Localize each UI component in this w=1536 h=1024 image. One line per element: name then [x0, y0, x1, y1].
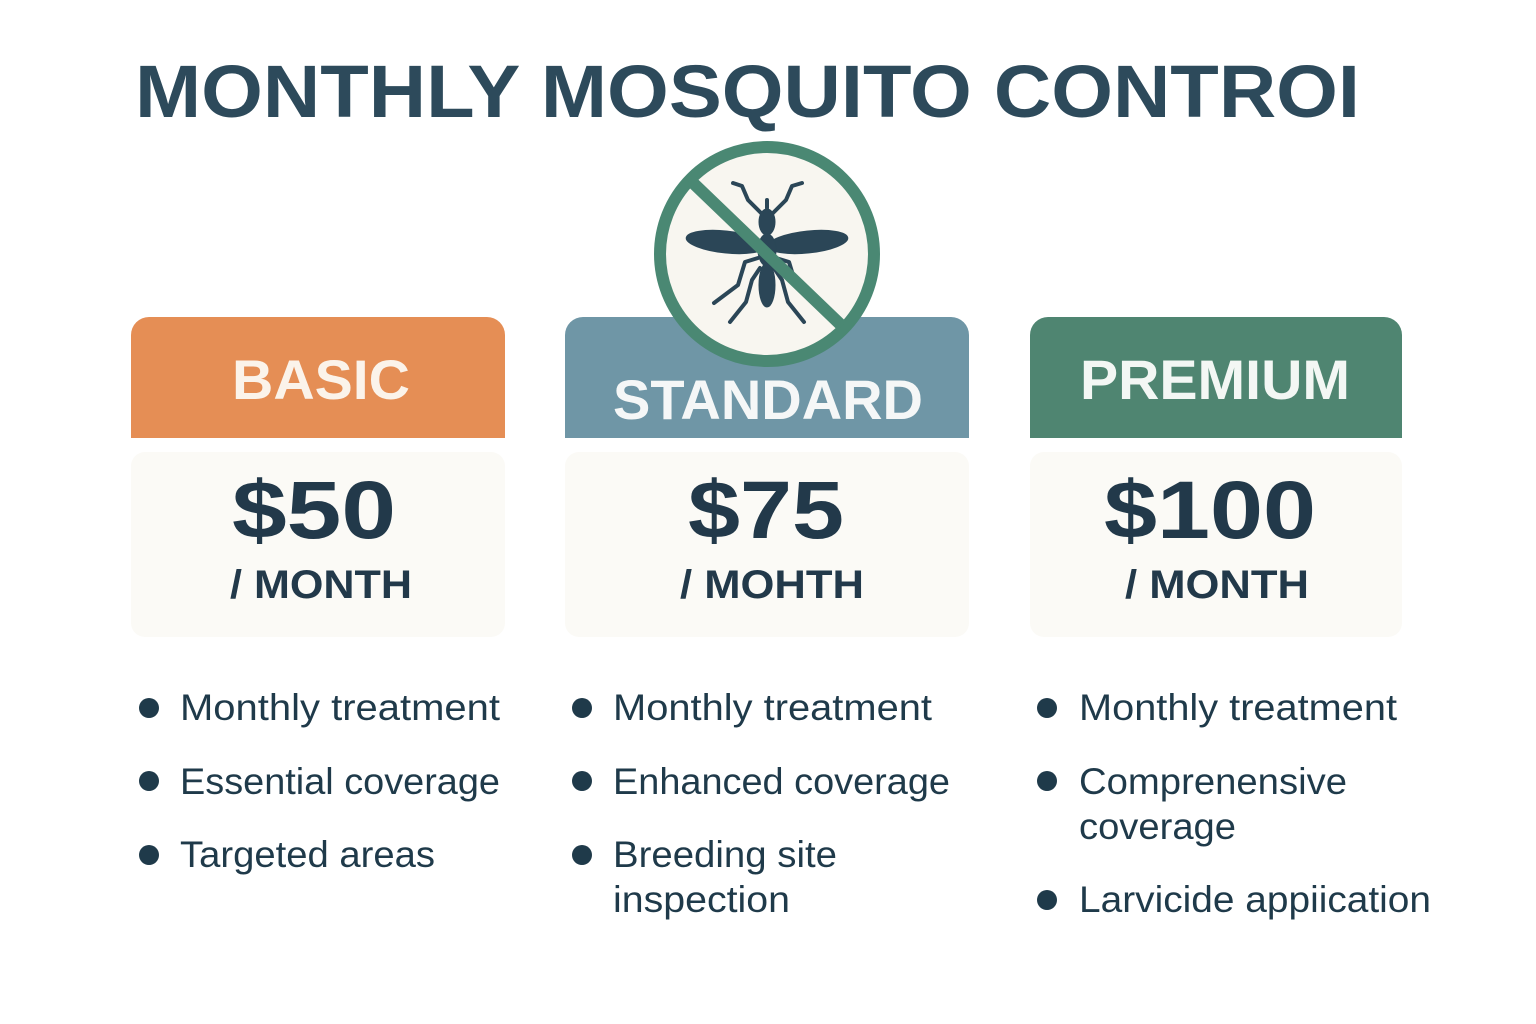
features: basic: Targeted areas: [180, 834, 435, 875]
features: premium: Larvicide appiication: [1079, 879, 1431, 920]
panel: standard: [565, 317, 969, 920]
price: premium: $100: [1104, 465, 1316, 556]
header: basic: BASIC: [232, 348, 410, 411]
features: premium: Monthly treatment: [1079, 687, 1398, 728]
features: basic: Monthly treatment: [180, 687, 501, 728]
features: standard: Breeding site: [613, 834, 837, 875]
header: premium: PREMIUM: [1080, 348, 1350, 411]
price: basic: / MONTH: [230, 563, 412, 607]
price: basic: $50: [232, 465, 396, 556]
header: standard: STANDARD: [613, 368, 923, 431]
features: basic: [139, 687, 501, 875]
title: MONTHLY MOSQUITO CONTROI: [135, 50, 1360, 133]
features: premium: coverage: [1079, 806, 1236, 847]
price: standard: [565, 452, 969, 637]
features: standard: [572, 687, 950, 920]
header: premium: [1030, 317, 1402, 438]
features: basic: Essential coverage: [180, 761, 500, 802]
price: basic: [131, 452, 505, 637]
features: standard: Monthly treatment: [613, 687, 933, 728]
price: premium: [1030, 452, 1402, 637]
price: standard: / MOHTH: [680, 563, 864, 607]
panel: basic: [131, 317, 505, 875]
icon: no mosquito: [660, 147, 874, 361]
features: premium: Comprenensive: [1079, 761, 1347, 802]
header: standard: [565, 317, 969, 438]
header: basic: [131, 317, 505, 438]
panel: premium: [1030, 317, 1431, 920]
features: premium: [1037, 687, 1431, 920]
price: premium: / MONTH: [1125, 563, 1309, 607]
features: standard: inspection: [613, 879, 790, 920]
features: standard: Enhanced coverage: [613, 761, 950, 802]
price: standard: $75: [688, 465, 844, 556]
